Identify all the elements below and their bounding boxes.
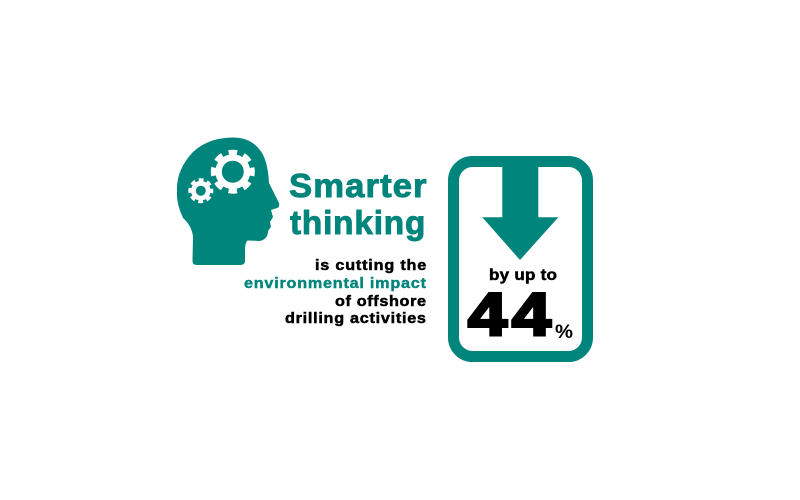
label: by up to: by up to [489, 267, 557, 284]
text block: description: of offshore [335, 294, 426, 310]
large gear [213, 152, 252, 191]
number: 44: 44 [468, 281, 551, 348]
text block: description: drilling activities [285, 311, 426, 327]
icon: head with gears [177, 137, 279, 265]
heading: Smarter thinking: Smarter [289, 168, 427, 205]
rounded frame [454, 162, 588, 356]
text block: description: environmental impact [244, 276, 426, 292]
head silhouette [177, 137, 279, 265]
heading: Smarter thinking [289, 168, 427, 242]
heading: Smarter thinking: thinking [290, 205, 425, 242]
panel: reduction stat [454, 162, 588, 356]
arrow: down [482, 165, 558, 260]
small gear [190, 180, 212, 202]
text block: description: is cutting the [315, 258, 427, 274]
percent sign: % [555, 322, 573, 343]
text block: description [244, 258, 427, 327]
